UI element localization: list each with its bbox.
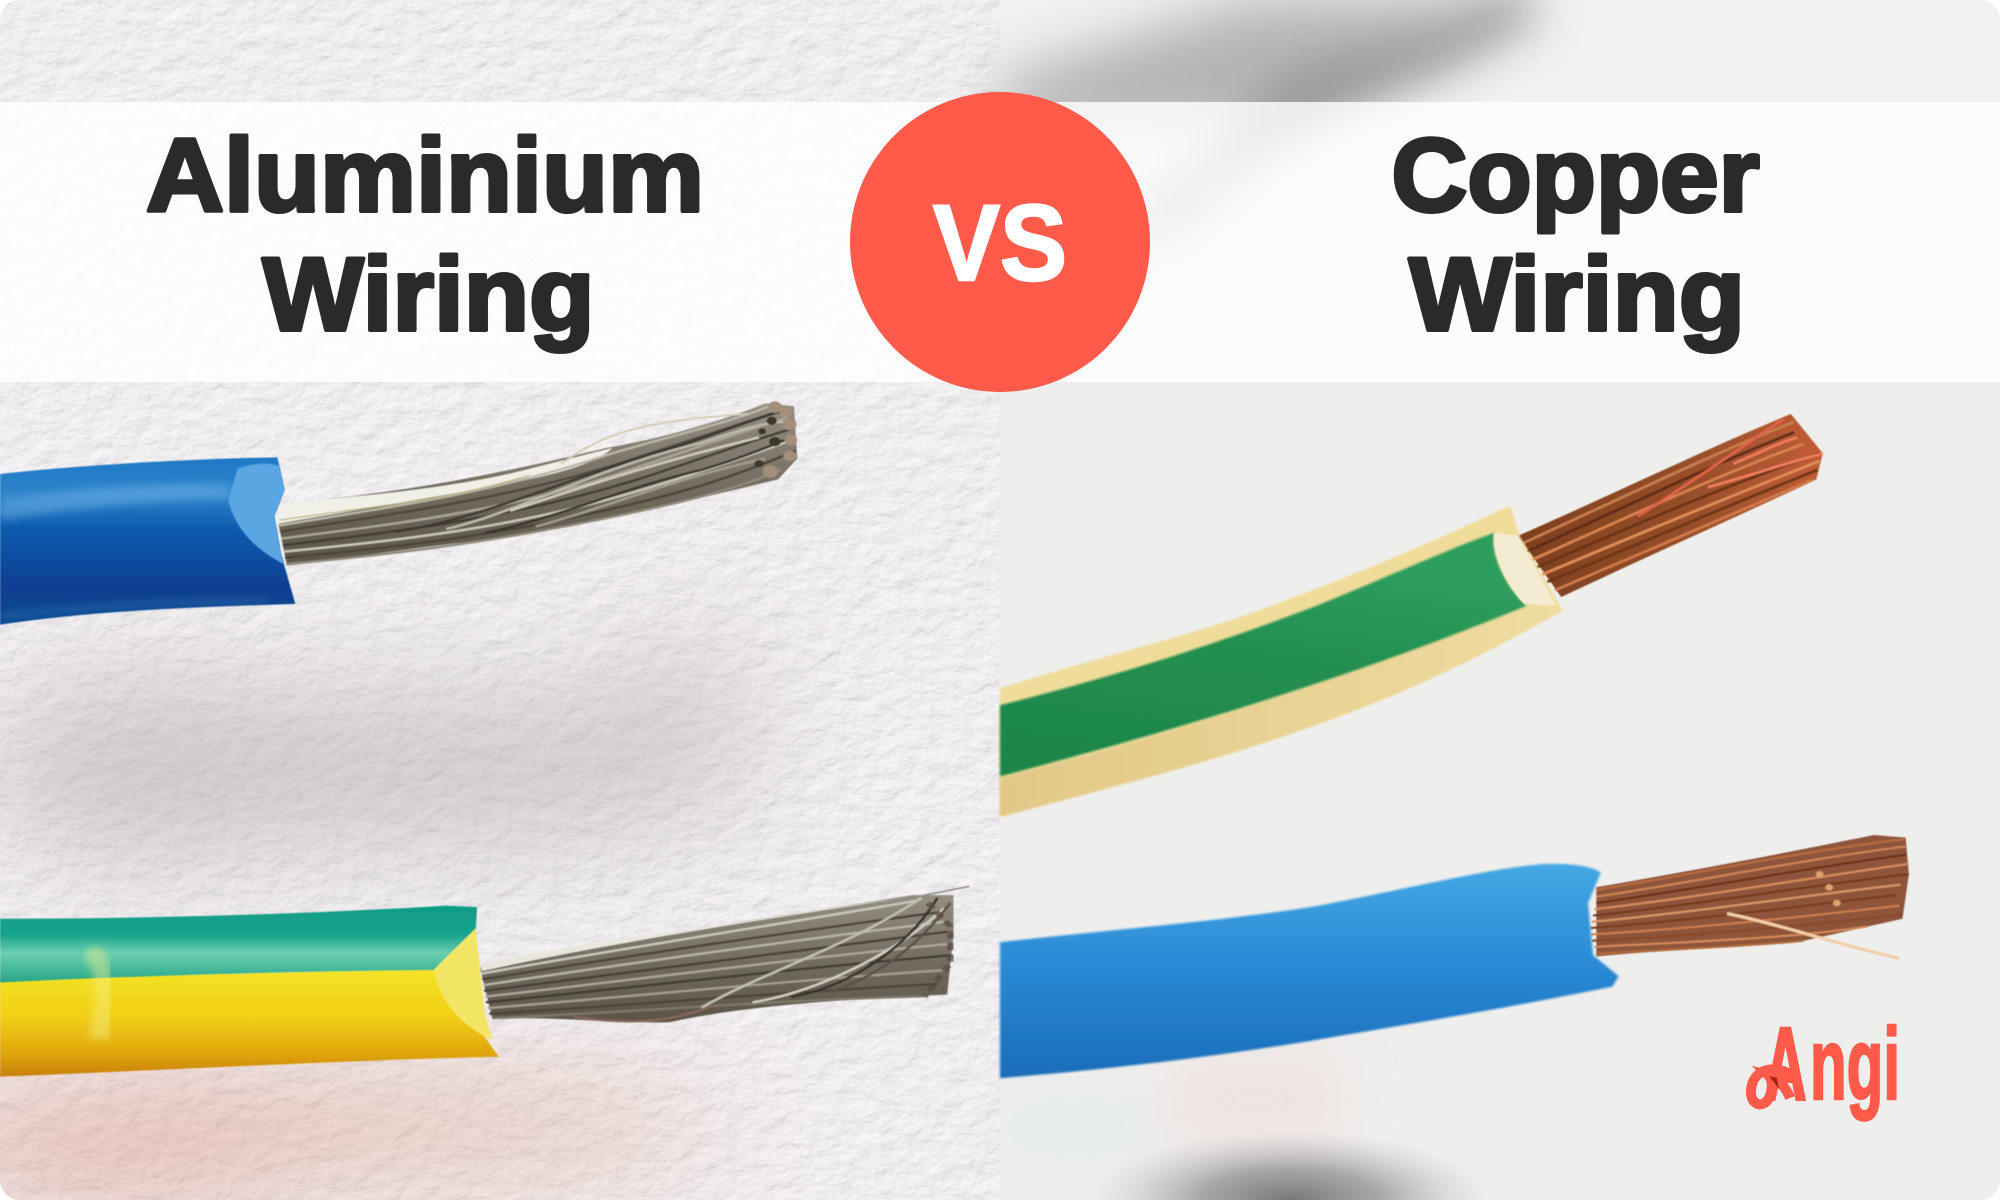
- sheath: blue: [0, 457, 295, 625]
- pale tint lower area: [1000, 1050, 1340, 1150]
- logo: Angi: A: [1765, 1007, 1806, 1121]
- wire: blue copper: [1000, 835, 1909, 1078]
- title: Copper Wiring: Copper: [1392, 118, 1760, 234]
- title band: aluminium: [0, 102, 1000, 382]
- sheath: green: [0, 906, 477, 982]
- panel: copper wire photo: [1000, 0, 2000, 1200]
- strands: silver bundle: [274, 401, 797, 566]
- sheath: green stripe: [1000, 533, 1526, 776]
- soft shadow on paper: [0, 640, 760, 1200]
- title: Copper Wiring: Wiring: [1409, 237, 1745, 353]
- sheath cut face: [434, 928, 492, 1040]
- logo: Angi: [1751, 1007, 1900, 1121]
- sheath: cream: [1000, 506, 1563, 817]
- panel: aluminium wire photo: [0, 0, 1000, 1200]
- sheath cut face: [1494, 533, 1556, 606]
- sheath crease highlight: [89, 950, 104, 1039]
- plain background: [1000, 0, 2000, 1200]
- vs badge: VS: [933, 182, 1067, 303]
- title: Copper Wiring: [1392, 118, 1760, 353]
- vs badge: [850, 92, 1150, 392]
- title band: copper: [1000, 102, 2000, 382]
- paper background: [0, 0, 1000, 1200]
- bottom dark blurred shadow: [1090, 1130, 1490, 1200]
- sheath: blue: [1000, 864, 1619, 1078]
- strands: copper bundle: [1518, 414, 1823, 597]
- title: Aluminium Wiring: Wiring: [262, 237, 594, 353]
- wire: green and yellow copper: [1000, 414, 1823, 817]
- wire: blue aluminium: [0, 401, 797, 625]
- sheath cut face: [228, 464, 284, 564]
- title: Aluminium Wiring: [146, 118, 704, 353]
- top grey blurred streak: [1000, 0, 2000, 235]
- title: Aluminium Wiring: Aluminium: [146, 118, 704, 234]
- sheath: yellow: [0, 968, 499, 1077]
- logo: Angi: ngi: [1810, 1007, 1900, 1121]
- strands: silver bundle: [480, 886, 969, 1022]
- logo loop: [1751, 1069, 1790, 1104]
- wire: green and yellow aluminium: [0, 886, 969, 1077]
- stray copper strand: [1727, 913, 1899, 958]
- strands: copper bundle: [1591, 835, 1909, 958]
